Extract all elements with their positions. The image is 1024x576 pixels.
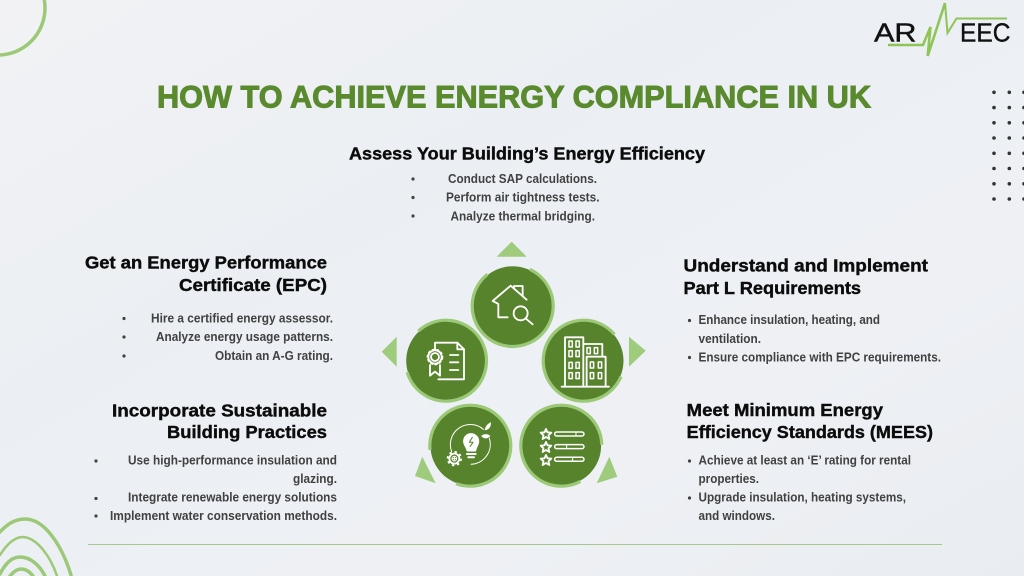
title: HOW TO ACHIEVE ENERGY COMPLIANCE IN UK: [157, 78, 871, 114]
bullet list: EPC: Analyze energy usage patterns.: [156, 330, 333, 344]
arrow: top: [497, 242, 527, 257]
arrow: left: [382, 337, 397, 367]
circle: sustainable bulb: [426, 401, 515, 490]
logo: ARWEEC: AR: [874, 18, 916, 48]
circle: house inspection: [459, 252, 567, 360]
bullet list: MEES: Achieve at least an ‘E’ rating for rental: [698, 454, 911, 468]
circle: certificate: [389, 303, 503, 418]
heading: MEES: Efficiency Standards (MEES): [687, 422, 933, 442]
heading: EPC: Get an Energy Performance: [85, 252, 327, 272]
arrow: bottom right: [597, 457, 617, 483]
heading: assess: Assess Your Building’s Energy Efficiency: [349, 144, 705, 164]
bullet list: sustainable: Integrate renewable energy solutions: [128, 491, 337, 505]
bullet list: MEES: properties.: [698, 472, 759, 486]
bullet list: EPC: [122, 312, 333, 363]
arrow: right: [629, 337, 646, 367]
circle: buildings: [531, 308, 637, 414]
heading: EPC: Certificate (EPC): [179, 275, 327, 295]
dot grid top right: [992, 90, 1024, 201]
circle: star ratings: [507, 391, 616, 500]
bullet list: sustainable: glazing.: [293, 472, 337, 486]
decorative concentric arcs bottom left: [0, 519, 71, 576]
bullet list: part L: Ensure compliance with EPC requirements.: [698, 351, 941, 365]
panel: part L requirements: [684, 256, 941, 365]
heading: sustainable: Incorporate Sustainable: [112, 400, 327, 420]
bullet list: part L: Enhance insulation, heating, and: [698, 313, 880, 327]
bullet list: MEES: [688, 454, 911, 523]
bullet list: part L: [688, 313, 941, 365]
decorative arc top left: [0, 0, 45, 55]
panel: minimum energy efficiency standards: [687, 400, 933, 523]
bullet list: assess: Conduct SAP calculations.: [448, 172, 597, 186]
arrow: bottom left: [415, 457, 436, 483]
logo: ARWEEC: [874, 3, 1010, 56]
bullet list: assess: Perform air tightness tests.: [446, 191, 600, 205]
panel: sustainable building practices: [94, 400, 337, 523]
bullet list: sustainable: Implement water conservation methods.: [110, 509, 337, 523]
bullet list: EPC: Hire a certified energy assessor.: [151, 312, 333, 326]
bullet list: MEES: and windows.: [698, 509, 775, 523]
bullet list: assess: [411, 172, 600, 224]
bullet list: part L: ventilation.: [698, 332, 761, 346]
heading: part L: [684, 256, 928, 298]
heading: MEES: Meet Minimum Energy: [687, 400, 883, 420]
bullet list: sustainable: Use high-performance insulation and: [128, 454, 337, 468]
panel: assess building energy efficiency: [349, 144, 705, 224]
bullet list: assess: Analyze thermal bridging.: [450, 210, 595, 224]
heading: part L: Part L Requirements: [684, 278, 861, 298]
icon: house with magnifier: [493, 286, 533, 324]
icon: light bulb with gear and leaf: [448, 423, 491, 465]
heading: MEES: [687, 400, 933, 442]
heading: sustainable: Building Practices: [167, 422, 327, 442]
bullet list: EPC: Obtain an A-G rating.: [215, 349, 333, 363]
icon: buildings: [562, 337, 609, 387]
bullet list: sustainable: [94, 454, 337, 523]
heading: EPC: [85, 252, 327, 295]
bullet list: MEES: Upgrade insulation, heating systems,: [698, 491, 906, 505]
logo: ARWEEC: EEC: [960, 18, 1010, 48]
divider line bottom: [88, 544, 942, 545]
panel: energy performance certificate: [85, 252, 333, 363]
heading: part L: Understand and Implement: [684, 256, 928, 276]
heading: sustainable: [112, 400, 327, 442]
icon: star rating bars: [541, 429, 584, 465]
icon: certificate document: [427, 343, 464, 379]
